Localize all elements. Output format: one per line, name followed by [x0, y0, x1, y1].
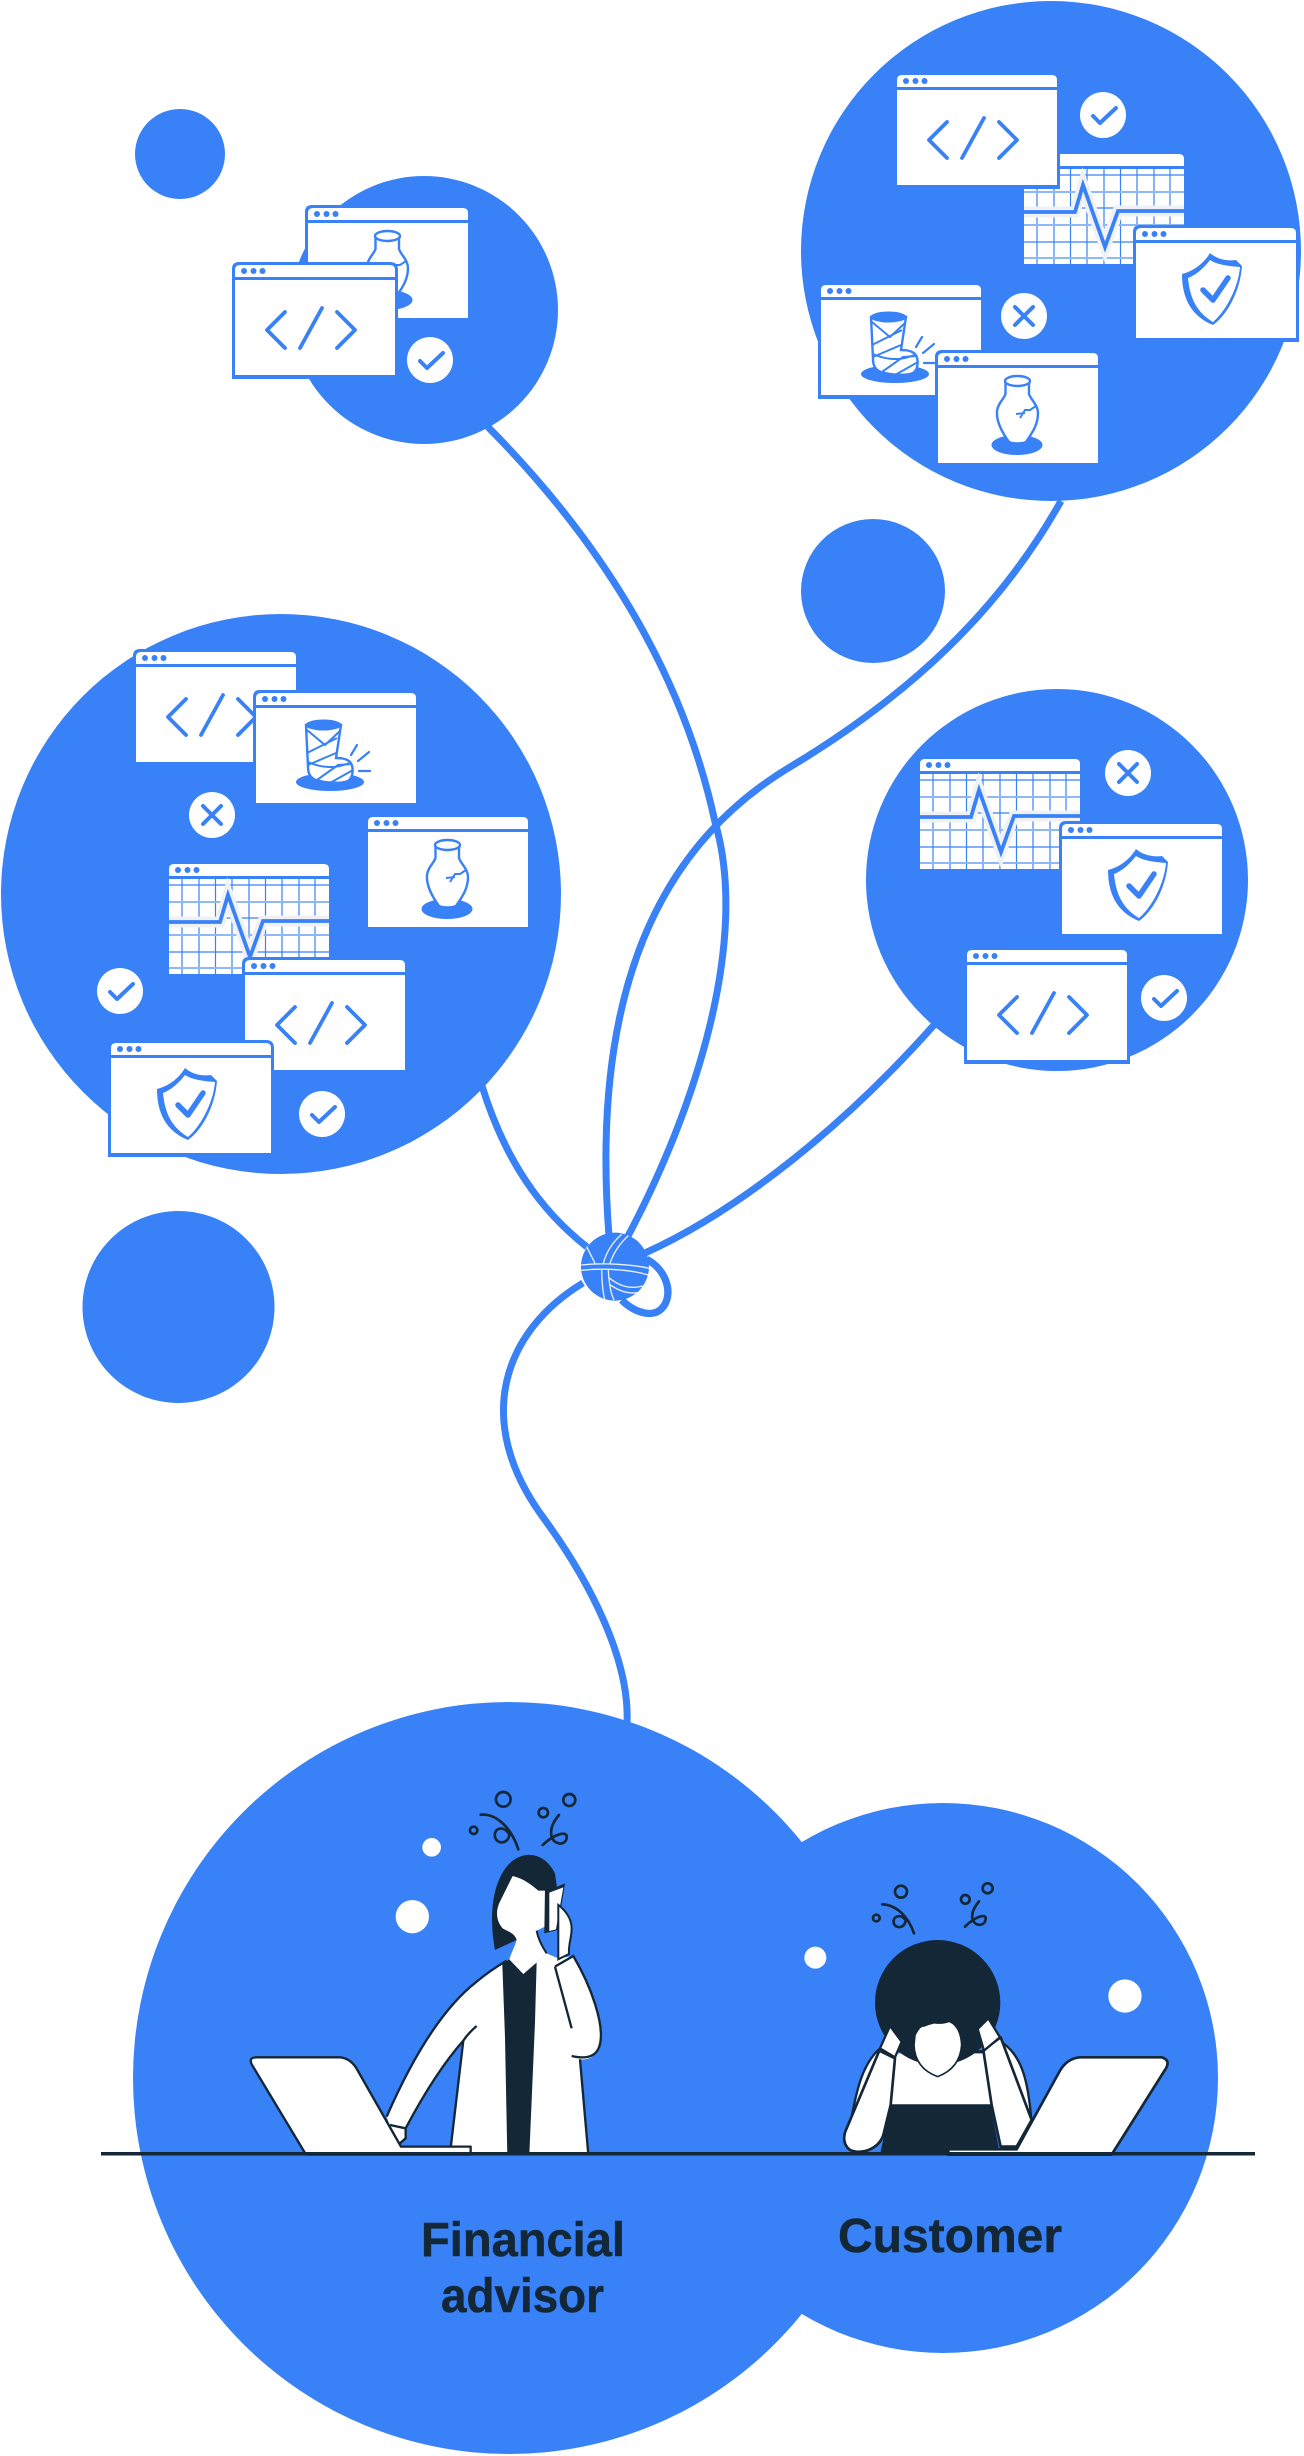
face: [914, 2021, 962, 2077]
face and neck: [497, 1876, 547, 1974]
hair: [492, 1855, 557, 1950]
window: cast: [818, 282, 984, 399]
laptop: [948, 2057, 1168, 2155]
icon: cross: [189, 792, 235, 838]
hand: [558, 1905, 572, 1959]
window: ecg: [917, 756, 1083, 873]
icon: check: [1141, 975, 1187, 1021]
label: financial advisor: [421, 2214, 625, 2323]
icon: yarn ball: [581, 1233, 668, 1313]
label: customer: Customer: [838, 2210, 1062, 2263]
icon: check: [407, 337, 453, 383]
torso: [880, 2050, 1000, 2155]
illustration: financial advisor: [251, 1792, 601, 2155]
label: financial advisor: advisor: [441, 2270, 604, 2323]
panel: top left bubble: [232, 176, 558, 444]
icon: check: [1080, 92, 1126, 138]
window: code: [232, 262, 398, 379]
window: shield: [1059, 821, 1225, 938]
panel: right bubble: [866, 689, 1248, 1071]
window: code: [964, 947, 1130, 1064]
phone: [544, 1883, 565, 1933]
desk line: [101, 2152, 1255, 2156]
window: shield: [108, 1040, 274, 1157]
window: ecg: [166, 861, 332, 978]
shirt: [502, 1959, 537, 2155]
window: vase: [305, 205, 471, 322]
white dots: [804, 1947, 1142, 2013]
white dots: [396, 1838, 441, 1933]
threads connecting circles to yarn ball: [482, 427, 1061, 1723]
decorative circle left: [82, 1211, 274, 1403]
window: shield: [1133, 225, 1299, 342]
thought squiggles: [470, 1792, 575, 1849]
decorative circle center: [801, 519, 945, 663]
window: vase: [935, 350, 1101, 467]
laptop: [251, 2057, 471, 2155]
icon: check: [299, 1091, 345, 1137]
label: financial advisor: Financial: [421, 2214, 625, 2267]
illustration: customer: [804, 1883, 1168, 2155]
window: code: [242, 957, 408, 1074]
panel: left bubble: [1, 614, 561, 1174]
hair: [875, 1940, 1000, 2065]
icon: cross: [1105, 750, 1151, 796]
panel: top right bubble: [801, 1, 1301, 501]
window: code: [133, 649, 299, 766]
window: code: [894, 72, 1060, 189]
right forearm and hand: [983, 2037, 1032, 2147]
thought squiggles: [873, 1883, 993, 1933]
coat: [387, 1953, 601, 2155]
icon: cross: [1001, 293, 1047, 339]
decorative circle top left: [135, 109, 225, 199]
window: cast: [253, 690, 419, 807]
icon: check: [97, 968, 143, 1014]
shoulders: [850, 2043, 1032, 2127]
window: vase: [365, 814, 531, 931]
window: ecg: [1021, 151, 1187, 268]
left forearm and hand: [844, 2051, 895, 2152]
panel: bottom bubbles: [133, 1702, 1218, 2454]
